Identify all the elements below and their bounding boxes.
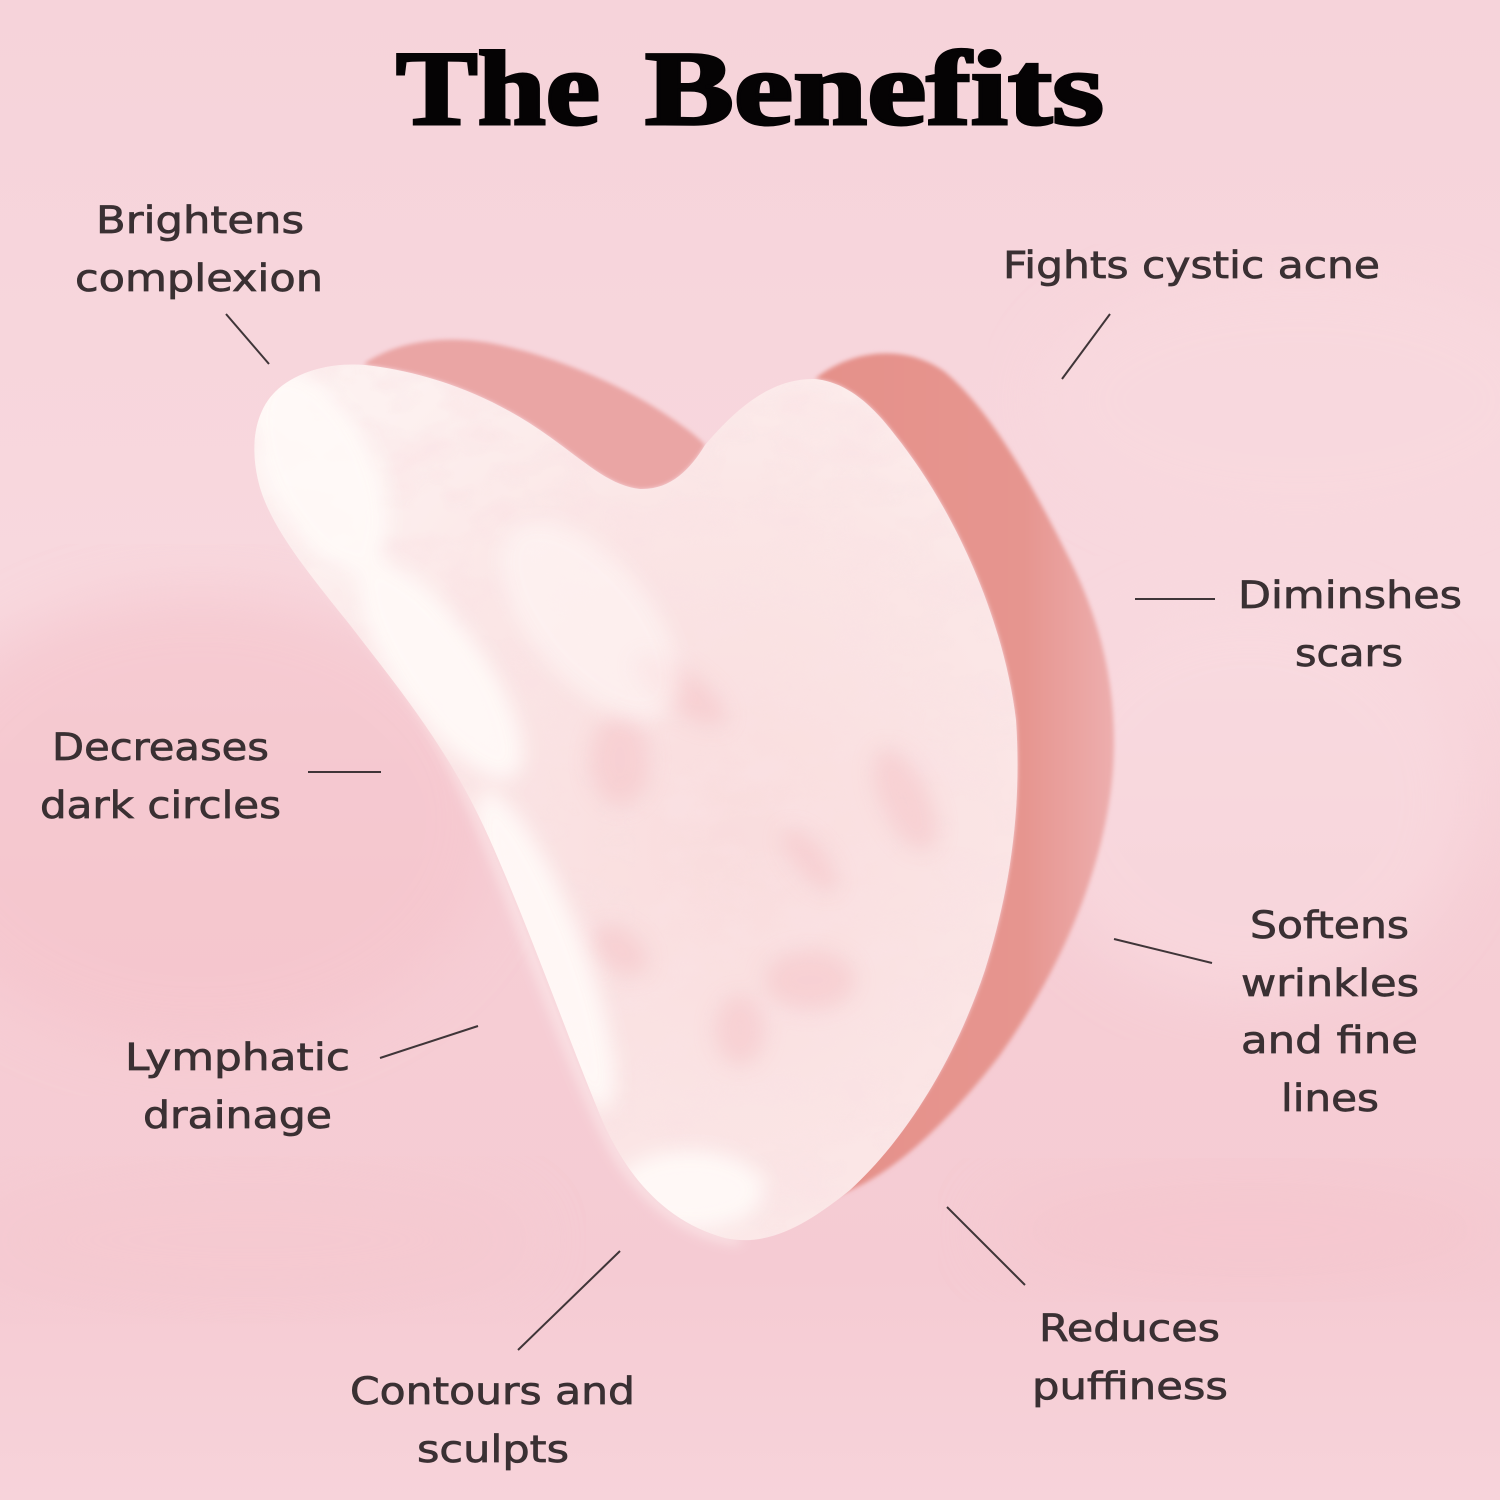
label: Brightens complexion: complexion — [75, 257, 323, 300]
label: Softens wrinkles and fine lines: wrinkles — [1241, 962, 1419, 1005]
label: Diminshes scars: scars — [1295, 632, 1403, 675]
label: Lymphatic drainage — [125, 1026, 478, 1137]
label: Contours and sculpts: Contours and — [350, 1370, 635, 1413]
title: Benefits — [645, 30, 1104, 147]
stone shadow: right crescent — [815, 353, 1114, 1197]
label: Contours and sculpts: sculpts — [417, 1428, 569, 1471]
label: Diminshes scars — [1135, 574, 1462, 675]
label: Softens wrinkles and fine lines: lines — [1281, 1077, 1379, 1120]
label: Diminshes scars: Diminshes — [1238, 574, 1462, 617]
label: Decreases dark circles — [40, 726, 381, 827]
title — [396, 30, 1104, 147]
label: Decreases dark circles: Decreases — [52, 726, 269, 769]
label: Brightens complexion — [75, 199, 323, 364]
label: Softens wrinkles and fine lines: Softens — [1250, 904, 1409, 947]
label: Decreases dark circles: dark circles — [40, 784, 281, 827]
label: Fights cystic acne — [1003, 244, 1380, 379]
label: Reduces puffiness: Reduces — [1039, 1307, 1220, 1350]
label: Lymphatic drainage: drainage — [143, 1094, 332, 1137]
label: Softens wrinkles and fine lines — [1114, 904, 1419, 1120]
label: Lymphatic drainage: Lymphatic — [125, 1036, 350, 1079]
title: The — [396, 30, 600, 147]
gua sha stone with shadow — [224, 340, 1114, 1250]
stone shadow: upper left — [365, 340, 705, 489]
soft glow around stone edge — [269, 400, 740, 1240]
label: Reduces puffiness — [947, 1207, 1228, 1408]
label: Contours and sculpts — [350, 1251, 635, 1471]
label: Reduces puffiness: puffiness — [1032, 1365, 1228, 1408]
label: Brightens complexion: Brightens — [96, 199, 304, 242]
label: Fights cystic acne: Fights cystic acne — [1003, 244, 1380, 287]
label: Softens wrinkles and fine lines: and fine — [1241, 1019, 1418, 1062]
rose quartz stone — [224, 347, 1030, 1250]
